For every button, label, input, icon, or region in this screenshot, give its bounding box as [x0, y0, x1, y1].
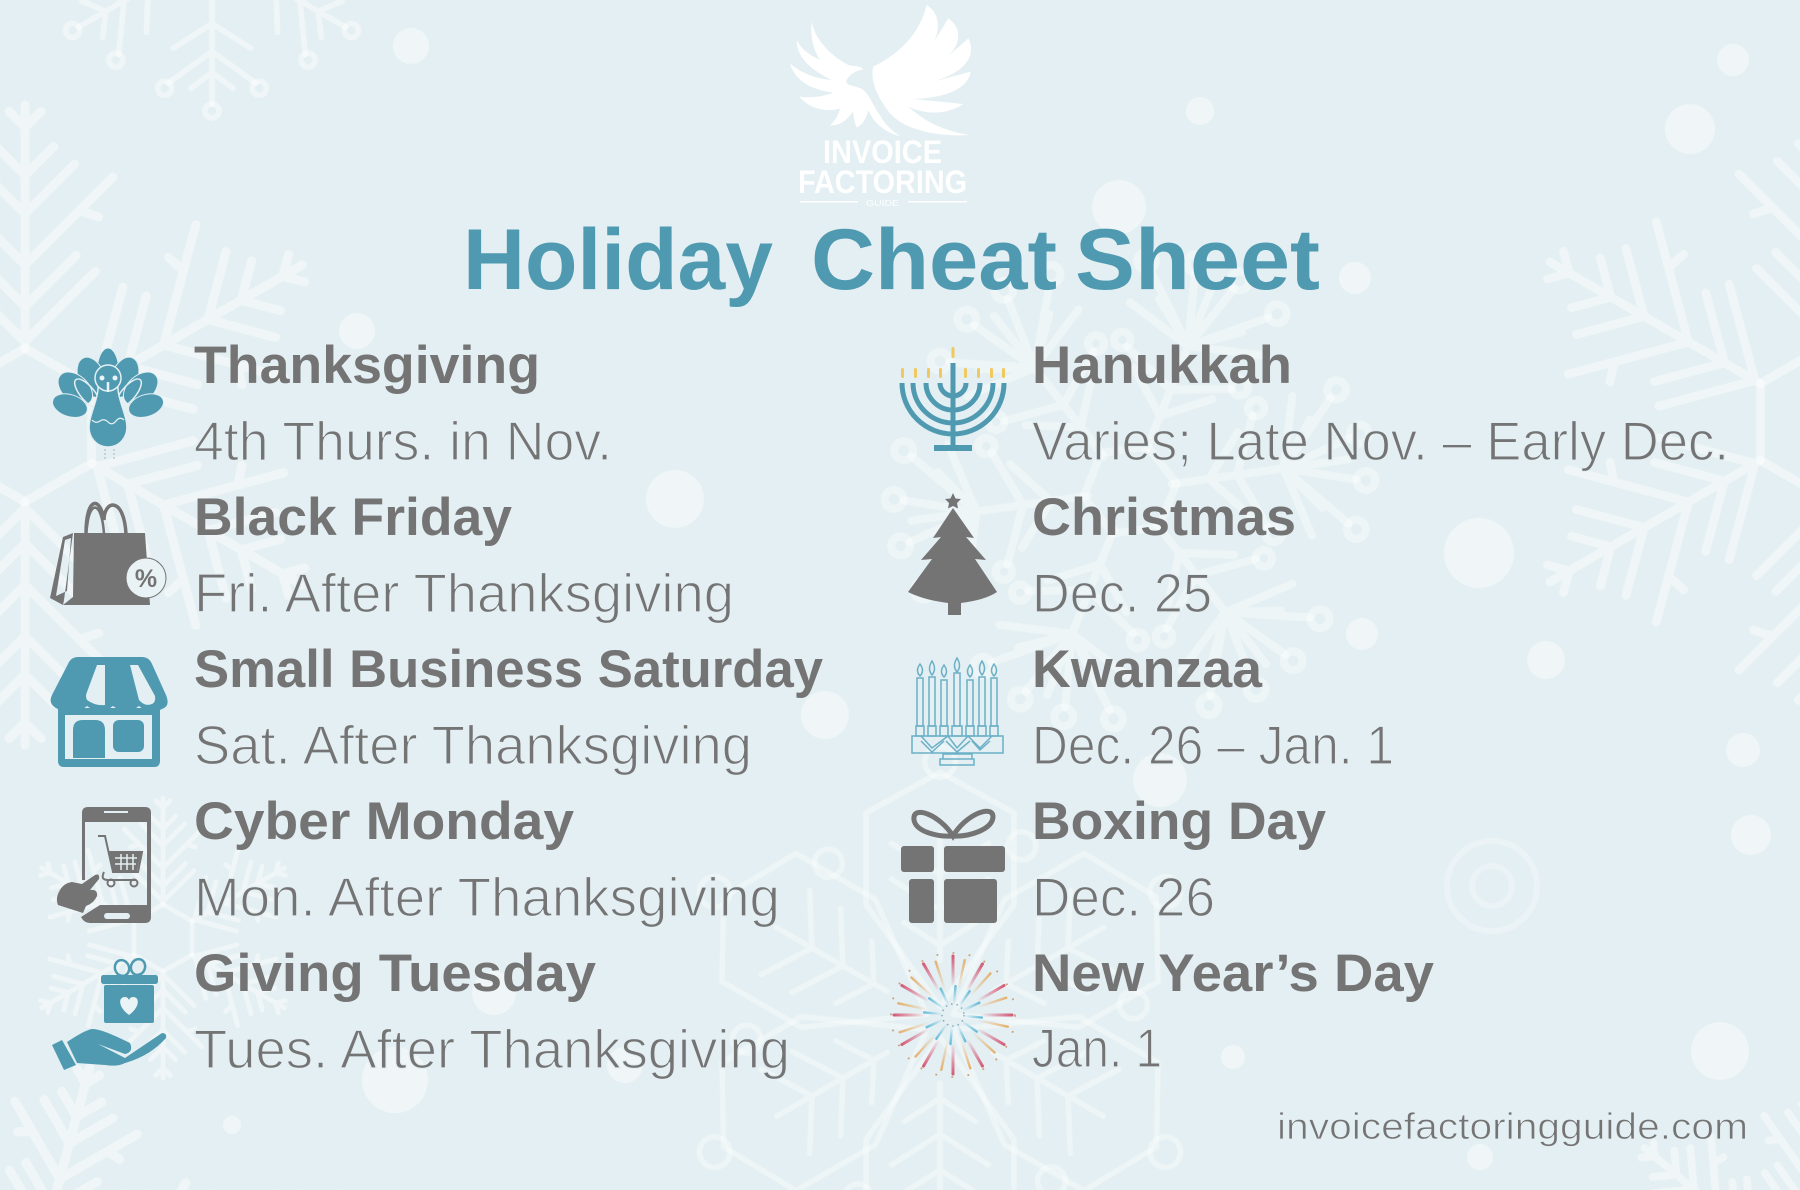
icon: gift box: [901, 811, 1005, 923]
panel: right column of holidays: [891, 336, 1729, 1079]
Thanksgiving text: Thanksgiving: [194, 336, 540, 395]
title: Sheet: [1075, 212, 1320, 308]
title: Cheat: [811, 212, 1057, 308]
icon: menorah: [901, 347, 1005, 451]
icon: storefront: [51, 657, 168, 767]
row: Small Business Saturday: [51, 640, 824, 776]
Boxing Day text: Dec. 26: [1032, 866, 1215, 928]
icon: hand holding gift: [52, 957, 166, 1070]
row: New Year's Day: [891, 944, 1435, 1079]
Small Business Saturday text: Small Business Saturday: [194, 640, 824, 699]
logo: Invoice Factoring Guide: [790, 5, 971, 208]
New Year's Day text: New Year’s Day: [1032, 944, 1435, 1003]
logo wordmark: GUIDE: [866, 199, 899, 208]
Cyber Monday text: Mon. After Thanksgiving: [194, 866, 780, 928]
icon: Christmas tree: [908, 493, 997, 615]
icon: fireworks: [891, 953, 1015, 1077]
Cyber Monday text: Cyber Monday: [194, 792, 575, 851]
panel: left column of holidays: [49, 336, 824, 1080]
Hanukkah text: Hanukkah: [1032, 336, 1292, 395]
icon: turkey: [49, 348, 167, 460]
logo wordmark: INVOICE: [823, 134, 942, 170]
Giving Tuesday text: Tues. After Thanksgiving: [194, 1018, 790, 1080]
Small Business Saturday text: [194, 640, 824, 776]
row: Christmas: [908, 488, 1296, 624]
row: Boxing Day: [901, 792, 1327, 928]
title: [463, 212, 1320, 308]
icon: shopping bag with percent: %: [135, 565, 157, 593]
row: Cyber Monday: [57, 792, 780, 928]
row: Thanksgiving: [49, 336, 612, 472]
footer website URL: invoicefactoringguide.com: [1277, 1106, 1748, 1147]
Hanukkah text: Varies; Late Nov. – Early Dec.: [1032, 410, 1729, 472]
Christmas text: [1032, 488, 1296, 624]
New Year's Day text: [1032, 944, 1435, 1079]
Black Friday text: [194, 488, 734, 624]
Black Friday text: Black Friday: [194, 488, 513, 547]
Kwanzaa text: Kwanzaa: [1032, 640, 1263, 699]
row: Hanukkah: [901, 336, 1729, 472]
icon: phone with cart: [57, 807, 151, 923]
Thanksgiving text: 4th Thurs. in Nov.: [194, 410, 612, 472]
Giving Tuesday text: [194, 944, 790, 1080]
Thanksgiving text: [194, 336, 612, 472]
Boxing Day text: [1032, 792, 1327, 928]
icon: shopping bag with percent: [50, 503, 166, 605]
Giving Tuesday text: Giving Tuesday: [194, 944, 597, 1003]
icon: kinara: [912, 658, 1003, 765]
icon: eagle: [790, 5, 971, 136]
Christmas text: Dec. 25: [1032, 562, 1212, 624]
row: Black Friday: [50, 488, 734, 624]
logo wordmark: [798, 134, 967, 208]
Kwanzaa text: [1032, 640, 1394, 776]
row: Kwanzaa: [912, 640, 1394, 776]
Black Friday text: Fri. After Thanksgiving: [194, 562, 734, 624]
Boxing Day text: Boxing Day: [1032, 792, 1327, 851]
Christmas text: Christmas: [1032, 488, 1296, 547]
title: Holiday: [463, 212, 773, 308]
Small Business Saturday text: Sat. After Thanksgiving: [194, 714, 752, 776]
New Year's Day text: Jan. 1: [1032, 1017, 1162, 1079]
Kwanzaa text: Dec. 26 – Jan. 1: [1032, 714, 1394, 776]
Cyber Monday text: [194, 792, 780, 928]
row: Giving Tuesday: [52, 944, 790, 1080]
logo wordmark: FACTORING: [798, 164, 967, 200]
Hanukkah text: [1032, 336, 1729, 472]
